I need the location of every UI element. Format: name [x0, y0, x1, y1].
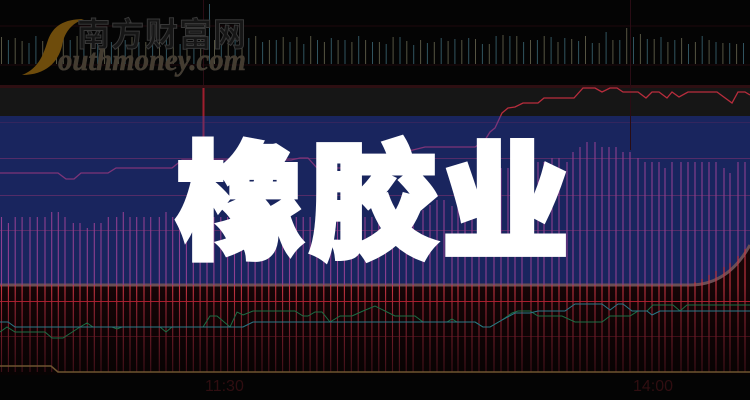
- panel: upper price band: [0, 85, 750, 116]
- panel: blue highlighted chart band: [0, 116, 750, 285]
- icon: gold swoosh S: [22, 19, 84, 75]
- line: teal indicator: [0, 304, 750, 327]
- watermark: site url: outhmoney.com: [58, 42, 246, 77]
- panel: lower indicator band: [0, 240, 750, 375]
- line: tan indicator: [0, 366, 750, 372]
- watermark: southmoney logo: [22, 16, 247, 77]
- watermark: site name: 南方财富网: [77, 16, 247, 53]
- line: intraday price: [0, 88, 750, 179]
- line: green indicator: [0, 305, 750, 338]
- axis label: 11:30: 11:30: [205, 378, 244, 395]
- axis label: 14:00: 14:00: [633, 378, 673, 395]
- chart: volume bars: [2, 4, 744, 64]
- chart: red lower bars: [2, 249, 745, 372]
- chart: purple volume bars: [2, 142, 745, 285]
- title: 橡胶业: [176, 133, 575, 275]
